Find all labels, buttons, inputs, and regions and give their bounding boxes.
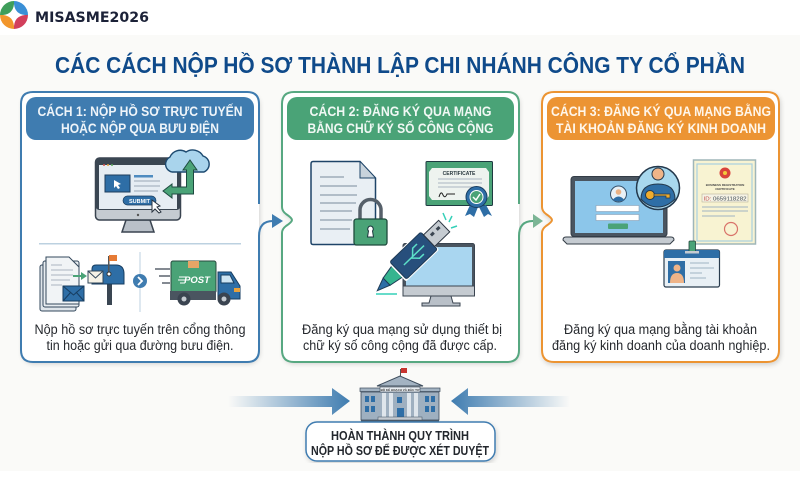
panel header: cách 3: CÁCH 3: ĐĂNG KÝ QUA MẠNG BẰNG [551, 104, 771, 119]
panel header: cách 1: CÁCH 1: NỘP HỒ SƠ TRỰC TUYẾN [38, 104, 242, 119]
icon: documents and mailbox [40, 255, 124, 311]
icon: next circle [133, 274, 147, 288]
arrow head: cách 2 to cách 3 [533, 214, 543, 228]
icon: government building [360, 368, 440, 422]
description: cách 2 [302, 322, 502, 353]
description: cách 3 [552, 322, 770, 353]
description: cách 1: Nộp hồ sơ trực tuyến trên cổng thông [34, 322, 246, 337]
icon: monitor [403, 244, 474, 306]
arrow: right to building [451, 388, 570, 415]
icon: certificate [426, 162, 492, 217]
description: cách 3: Đăng ký qua mạng bằng tài khoản [564, 322, 757, 337]
panel header: cách 3: TÀI KHOẢN ĐĂNG KÝ KINH DOANH [556, 121, 766, 136]
callout: completion: HOÀN THÀNH QUY TRÌNH [331, 428, 469, 443]
icon: business registration certificate: BUSINESS REGISTRATION [706, 183, 744, 187]
description: cách 1 [34, 322, 246, 353]
icon: government building: BỘ KẾ HOẠCH VÀ ĐẦU TƯ [381, 387, 420, 392]
panel header: cách 2 [287, 97, 514, 140]
panel: cách 1 [21, 92, 273, 362]
logo [0, 1, 149, 29]
panel header: cách 2: CÁCH 2: ĐĂNG KÝ QUA MẠNG [310, 104, 492, 119]
panel header: cách 2: BẰNG CHỮ KÝ SỐ CÔNG CỘNG [308, 121, 494, 136]
icon: id badge [664, 241, 720, 287]
icon: user with key [636, 166, 680, 210]
description: cách 3: đăng ký kinh doanh của doanh nghiệp. [552, 338, 770, 353]
description: cách 1: tin hoặc gửi qua đường bưu điện. [46, 338, 234, 353]
panel: cách 2 [282, 92, 533, 362]
icon: business registration certificate: CERTIFICATE [715, 187, 735, 191]
icon: usb pen token [368, 213, 457, 300]
panel: cách 3 [542, 92, 779, 362]
callout: completion: NỘP HỒ SƠ ĐỂ ĐƯỢC XÉT DUYỆT [311, 443, 489, 458]
description: cách 2: chữ ký số công cộng đã được cấp. [303, 338, 497, 353]
icon: logo mark [0, 1, 28, 29]
icon: business registration certificate: ID: 0659118282 [704, 196, 746, 202]
icon: business registration certificate [694, 160, 756, 244]
panel header: cách 3 [547, 97, 775, 140]
brand name: MISASME2026 [35, 10, 149, 26]
callout: completion [306, 422, 495, 461]
icon: monitor submitting to cloud [96, 150, 209, 232]
description: cách 2: Đăng ký qua mạng sử dụng thiết bị [302, 322, 502, 337]
icon: post truck [155, 261, 240, 306]
panel header: cách 1: HOẶC NỘP QUA BƯU ĐIỆN [61, 121, 219, 136]
arrow head: cách 1 to cách 2 [272, 214, 283, 228]
panel header: cách 1 [26, 97, 254, 140]
icon: laptop login [563, 176, 674, 244]
icon: certificate: CERTIFICATE [443, 171, 476, 177]
icon: post truck: POST [184, 275, 211, 286]
icon: locked document [311, 162, 387, 245]
icon: monitor submitting to cloud: SUBMIT [129, 199, 151, 205]
arrow: left to building [228, 388, 350, 415]
